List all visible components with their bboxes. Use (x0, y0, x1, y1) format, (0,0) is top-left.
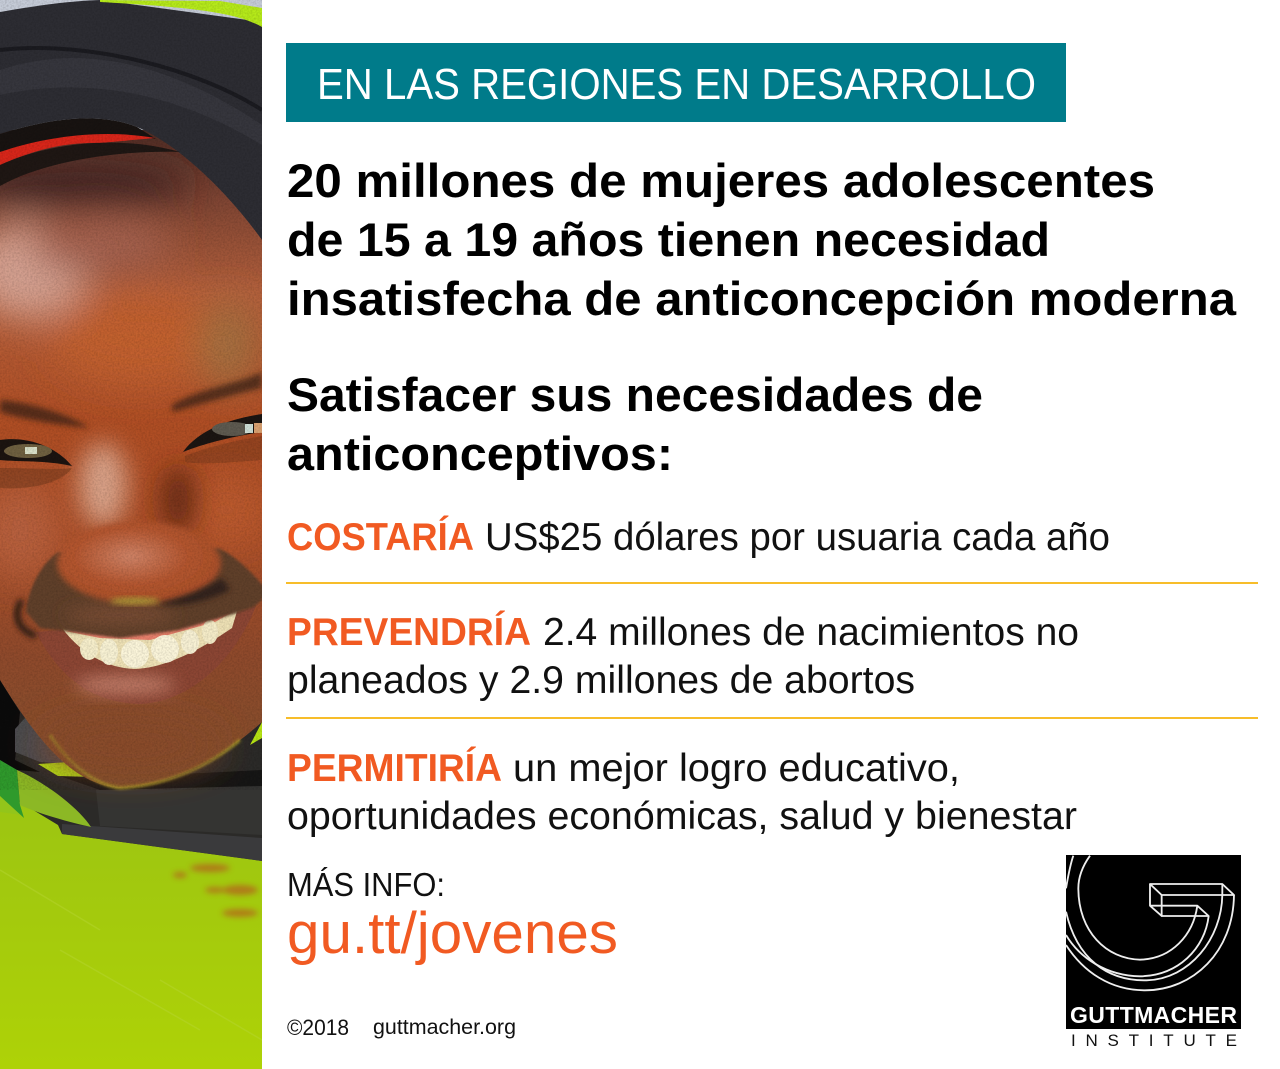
item: prevention: 2.4 millones de nacimientos no (543, 611, 1079, 654)
hairline (0, 143, 180, 186)
item: benefits: oportunidades económicas, salud y bienestar (287, 795, 1077, 838)
item: benefits: PERMITIRÍA (287, 746, 502, 790)
heading: unmet need (287, 154, 1237, 325)
hat (0, 0, 262, 240)
more info link: gu.tt/jovenes (287, 901, 618, 966)
face (0, 130, 262, 788)
logo: Guttmacher Institute (1066, 855, 1241, 1050)
footer credits (287, 1015, 516, 1040)
red headband (0, 118, 156, 152)
subheading: meeting needs: anticonceptivos: (287, 427, 673, 480)
lime collar pieces (38, 762, 84, 777)
footer credits: ©2018 (287, 1015, 349, 1040)
right eye (183, 414, 262, 463)
item: prevention: planeados y 2.9 millones de abortos (287, 659, 915, 702)
left eye (0, 439, 72, 488)
jaw rim (50, 735, 240, 788)
upper lip (26, 548, 268, 638)
item: cost: COSTARÍA (287, 515, 474, 559)
item: prevention (287, 610, 1079, 702)
leaf folds (0, 796, 20, 814)
heading: unmet need: de 15 a 19 años tienen necesidad (287, 213, 1050, 266)
lower lip (36, 606, 256, 704)
item: prevention: PREVENDRÍA (287, 610, 531, 654)
item: cost: US$25 dólares por usuaria cada año (485, 516, 1110, 559)
mouth corner crease (17, 600, 36, 636)
nose (57, 522, 221, 604)
item: benefits: un mejor logro educativo, (513, 747, 960, 790)
footer credits: guttmacher.org (373, 1016, 516, 1039)
lime hat band (100, 0, 262, 27)
item: benefits (287, 746, 1077, 838)
grain texture (0, 0, 262, 790)
nose bridge highlight (79, 443, 127, 527)
heading: unmet need: 20 millones de mujeres adolescentes (287, 154, 1155, 207)
leaf veins (0, 870, 262, 1040)
logo: Guttmacher Institute: GUTTMACHER (1070, 1002, 1237, 1028)
teeth (62, 608, 238, 669)
logo: Guttmacher Institute: INSTITUTE (1071, 1031, 1237, 1050)
reddish speckles (173, 864, 258, 917)
subheading: meeting needs (287, 368, 983, 480)
eyebrows (0, 372, 262, 428)
more info link (287, 866, 618, 966)
green garment (0, 800, 262, 1069)
icon: G emblem (1066, 856, 1234, 990)
heading: unmet need: insatisfecha de anticoncepción moderna (287, 272, 1237, 325)
banner: regions: EN LAS REGIONES EN DESARROLLO (317, 60, 1036, 109)
subheading: meeting needs: Satisfacer sus necesidades de (287, 368, 983, 421)
dark scarf at neck (0, 680, 262, 861)
more info link: MÁS INFO: (287, 866, 445, 903)
banner: regions (286, 43, 1066, 122)
photo: smiling young woman (0, 0, 270, 1069)
